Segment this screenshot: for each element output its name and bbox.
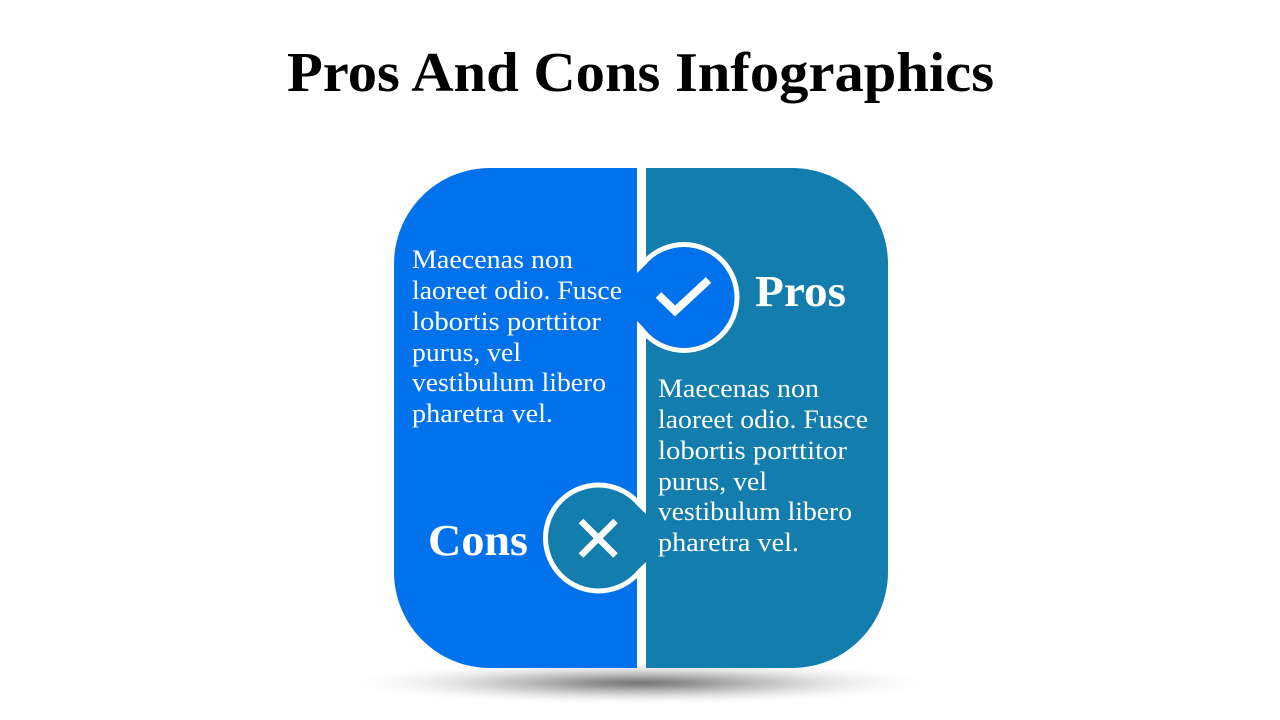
text block: pros description: laoreet odio. Fusce	[658, 404, 868, 434]
text block: cons description: Maecenas non	[412, 244, 573, 274]
text block: cons description: purus, vel	[412, 337, 521, 367]
title: Pros And Cons Infographics	[287, 42, 994, 104]
heading: cons: Cons	[428, 516, 528, 565]
text block: pros description	[658, 373, 868, 557]
text block: pros description: lobortis porttitor	[658, 435, 847, 465]
text block: cons description: lobortis porttitor	[412, 306, 601, 336]
pros badge	[634, 247, 734, 348]
icon: check mark	[658, 280, 708, 311]
text block: cons description	[412, 244, 622, 428]
pros circle white ring	[628, 242, 740, 353]
cons circle white ring	[543, 482, 637, 594]
text block: pros description: vestibulum libero	[658, 496, 852, 526]
heading: pros: Pros	[755, 267, 846, 316]
text block: cons description: pharetra vel.	[412, 398, 553, 428]
text block: pros description: pharetra vel.	[658, 527, 799, 557]
panel: pros (teal)	[628, 168, 888, 668]
text block: cons description: vestibulum libero	[412, 367, 606, 397]
text block: pros description: purus, vel	[658, 466, 767, 496]
panel: cons (blue)	[394, 168, 654, 668]
icon: cross mark	[581, 521, 616, 556]
shadow under the panels	[356, 662, 924, 704]
cons badge	[548, 488, 649, 588]
text block: cons description: laoreet odio. Fusce	[412, 275, 622, 305]
text block: pros description: Maecenas non	[658, 373, 819, 403]
